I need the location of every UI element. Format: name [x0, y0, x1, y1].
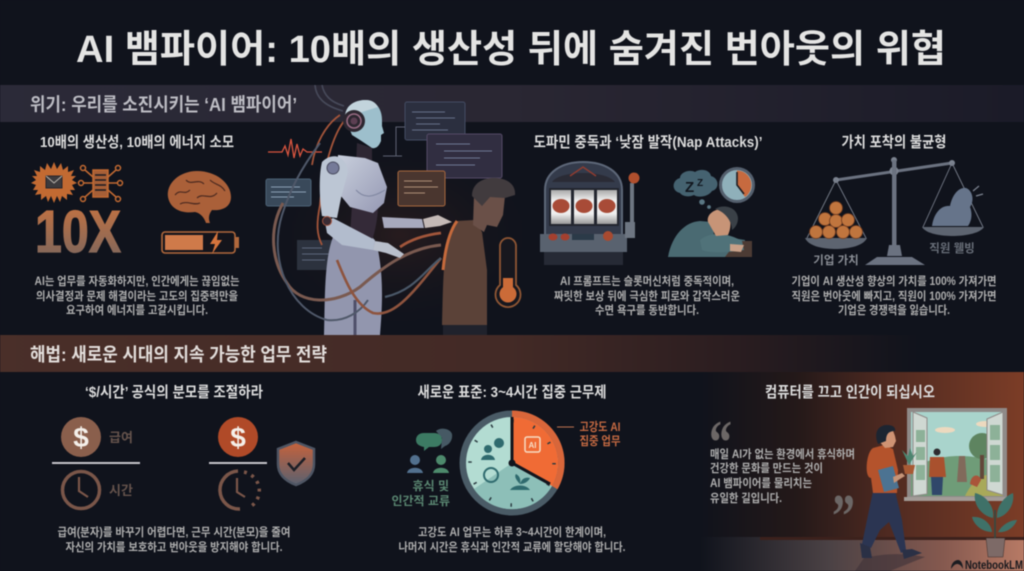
label: employee wellbeing: 직원 웰빙 — [929, 241, 975, 255]
icon: balance scale — [805, 157, 984, 265]
robot legs — [324, 236, 382, 335]
quote text: 매일 AI가 없는 환경에서 휴식하며 — [710, 447, 855, 461]
thermometer — [496, 238, 520, 307]
panel: turn off computer — [709, 384, 1023, 571]
panel: value capture imbalance — [792, 134, 996, 317]
dopamine body text: AI 프롬프트는 슬롯머신처럼 중독적이며, — [560, 275, 734, 288]
schedule body text: 고강도 AI 업무는 하루 3~4시간이 한계이며, — [418, 525, 606, 539]
icon: work clock — [460, 410, 565, 516]
icon: brain — [168, 171, 231, 223]
head cables — [315, 85, 344, 111]
label: corporate value: 기업 가치 — [813, 253, 859, 267]
quote text: 건강한 문화를 만드는 것이 — [710, 461, 823, 475]
quote text — [710, 447, 855, 505]
crisis heading: 위기: 우리를 소진시키는 ‘AI 뱀파이어’ — [30, 94, 297, 115]
icon: stress marks — [973, 186, 983, 196]
icon: close quote: ” — [832, 483, 855, 551]
icon: coin pile — [810, 202, 862, 238]
fraction line — [52, 462, 140, 464]
panel: crisis section — [0, 85, 1024, 122]
value heading: 가치 포착의 불균형 — [842, 134, 946, 151]
panel: energy consumption — [31, 134, 240, 317]
energy body text: 의사결정과 문제 해결이라는 고도의 집중력만을 — [36, 289, 238, 303]
background: wall and floor lower right — [700, 372, 1024, 571]
icon: salary coin accent — [218, 417, 258, 457]
cables — [274, 203, 441, 300]
energy heading: 10배의 생산성, 10배의 에너지 소모 — [40, 134, 234, 151]
value body text — [792, 274, 996, 317]
crisis section band — [0, 85, 1024, 122]
panel: focused work schedule — [391, 384, 626, 554]
icon: slot machine — [540, 162, 640, 265]
label: rest and human interaction: 인간적 교류 — [391, 494, 450, 508]
robot headphone — [343, 110, 365, 132]
icon: burst with mail — [31, 162, 77, 203]
label: rest and human interaction — [391, 478, 450, 508]
schedule heading: 새로운 표준: 3~4시간 집중 근무제 — [418, 384, 606, 401]
formula heading: ‘$/시간’ 공식의 분모를 조절하라 — [85, 384, 263, 401]
icon: reduced clock — [220, 471, 259, 509]
robot neck and waist — [356, 143, 372, 165]
dopamine body text: 짜릿한 보상 뒤에 극심한 피로와 갑작스러운 — [554, 289, 740, 303]
icon: zzz thought cloud: Z — [685, 179, 694, 196]
small potted plant in window — [902, 448, 917, 474]
icon: zzz thought cloud: Z — [697, 178, 703, 189]
robot torso — [336, 155, 387, 213]
robot arms — [320, 156, 452, 258]
value body text: 직원은 번아웃에 빠지고, 직원이 100% 가져가면 — [792, 289, 996, 303]
icon: time clock — [62, 472, 100, 508]
label: time: 시간 — [109, 483, 133, 498]
energy body text — [34, 274, 240, 317]
icon: salary coin: $ — [73, 422, 89, 453]
panel: solution section — [0, 335, 1024, 372]
dopamine heading: 도파민 중독과 ‘낮잠 발작(Nap Attacks)’ — [534, 134, 762, 151]
formula body text — [58, 525, 290, 554]
icon: salary coin accent: $ — [230, 422, 246, 453]
quote text: 유일한 길입니다. — [710, 491, 782, 505]
label: rest and human interaction: 휴식 및 — [413, 478, 449, 493]
schedule body text: 나머지 시간은 휴식과 인간적 교류에 할당해야 합니다. — [398, 540, 626, 554]
callout line — [557, 426, 574, 428]
human heading: 컴퓨터를 끄고 인간이 되십시오 — [765, 384, 935, 401]
title: AI 뱀파이어: 10배의 생산성 뒤에 숨겨진 번아웃의 위협 — [76, 29, 946, 71]
icon: low battery — [162, 231, 239, 254]
schedule body text — [398, 525, 626, 554]
solution heading: 해법: 새로운 시대의 지속 가능한 업무 전략 — [30, 344, 327, 365]
dopamine body text: 수면 욕구를 동반합니다. — [595, 303, 699, 317]
ECG line — [268, 139, 322, 158]
icon: sleeping man — [668, 206, 752, 257]
label: high intensity AI work: 집중 업무 — [580, 434, 620, 448]
energy body text: 요구하여 에너지를 고갈시킵니다. — [66, 303, 208, 317]
icon: work clock: AI — [528, 441, 536, 450]
robot head — [345, 100, 384, 148]
icon: document network — [78, 166, 122, 202]
fraction line short — [209, 462, 267, 464]
icon: zzz thought cloud — [674, 170, 718, 209]
label: high intensity AI work — [580, 420, 620, 448]
icon: chat people — [407, 429, 452, 473]
dopamine body text — [554, 275, 740, 317]
quote text: AI 뱀파이어를 물리치는 — [710, 477, 812, 490]
tired man — [442, 178, 515, 335]
potted plant — [972, 493, 1017, 557]
value body text: 기업은 경쟁력을 잃습니다. — [838, 303, 950, 317]
illustration: AI vampire robot draining human — [250, 85, 550, 340]
icon: wall clock — [720, 168, 754, 202]
label: salary: 급여 — [109, 430, 133, 445]
panel: denominator formula — [52, 384, 314, 554]
icon: open quote: “ — [709, 409, 732, 477]
formula body text: 급여(분자)를 바꾸기 어렵다면, 근무 시간(분모)을 줄여 — [58, 525, 290, 539]
solution section band — [0, 335, 1024, 372]
icon: salary coin — [61, 417, 101, 457]
icon: exhausted employee — [932, 188, 973, 226]
10X stat: 10X — [35, 199, 121, 265]
energy body text: AI는 업무를 자동화하지만, 인간에게는 끊임없는 — [34, 274, 240, 288]
formula body text: 자신의 가치를 보호하고 번아웃을 방지해야 합니다. — [66, 540, 282, 554]
code windows — [266, 102, 502, 270]
icon: shield check — [278, 442, 314, 485]
walking man — [855, 425, 925, 571]
window scene — [904, 408, 1007, 501]
label: high intensity AI work: 고강도 AI — [580, 420, 620, 434]
panel: dopamine addiction — [534, 134, 762, 317]
value body text: 기업이 AI 생산성 향상의 가치를 100% 가져가면 — [792, 274, 996, 288]
